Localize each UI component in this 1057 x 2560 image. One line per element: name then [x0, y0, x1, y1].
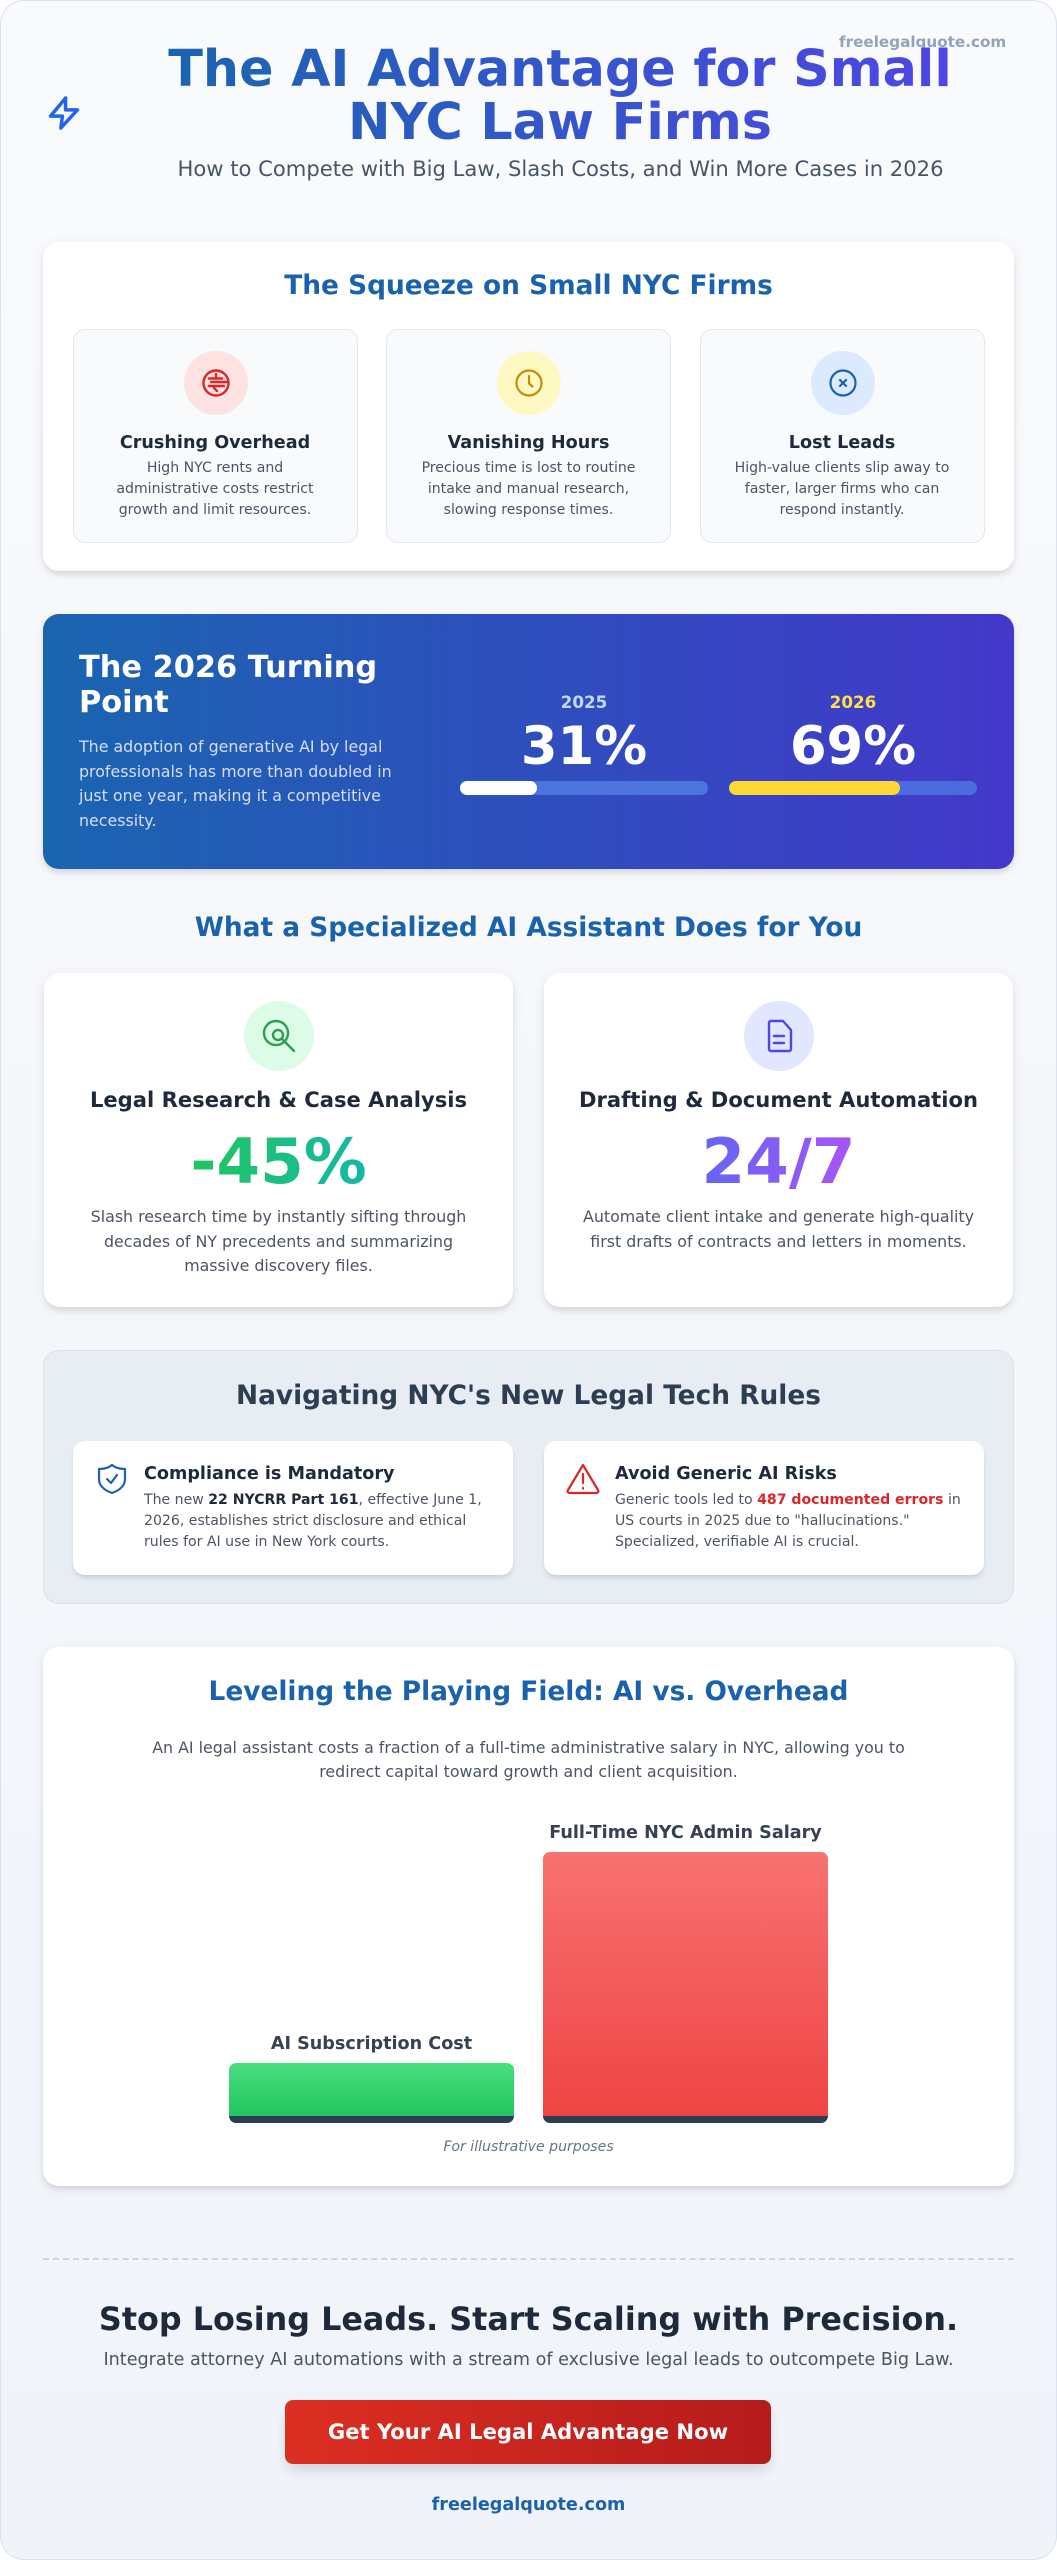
card text [91, 1207, 466, 1275]
card text: 2026, establishes strict disclosure and ethical [144, 1512, 466, 1528]
card: generic AI risks [544, 1441, 984, 1575]
card title: Compliance is Mandatory [144, 1464, 395, 1484]
bar label: AI Subscription Cost [271, 2034, 472, 2054]
progress fill [729, 781, 900, 795]
card title: Lost Leads [789, 433, 895, 453]
year label: 2026 [830, 692, 876, 712]
card text: intake and manual research, [428, 480, 629, 496]
card: crushing overhead [72, 329, 358, 543]
stat: 2026 [729, 692, 977, 795]
CTA button: Get Your AI Legal Advantage Now [328, 2419, 728, 2444]
icon: x circle [810, 351, 874, 415]
bar: admin salary [543, 1823, 828, 2123]
divider [43, 2258, 1014, 2260]
card text: massive discovery files. [184, 1256, 373, 1275]
stat: 2025 [460, 692, 708, 795]
card text [144, 1492, 482, 1550]
card text: Generic tools led to 487 documented errors in [615, 1492, 961, 1508]
bar: AI subscription [229, 2034, 514, 2123]
heading: what AI does: What a Specialized AI Assistant Does for You [195, 912, 862, 943]
percent value: 69% [790, 716, 916, 777]
panel: 2026 turning point [43, 614, 1014, 869]
stat: -45%: -45% [190, 1125, 367, 1198]
card text: Specialized, verifiable AI is crucial. [615, 1534, 859, 1550]
brand watermark: freelegalquote.com [839, 33, 1006, 51]
heading: rules: Navigating NYC's New Legal Tech Rules [236, 1380, 821, 1411]
intro text [152, 1738, 905, 1781]
card: lost leads [700, 329, 984, 543]
CTA text: Integrate attorney AI automations with a stream of exclusive legal leads to outcompete Big Law. [103, 2350, 954, 2370]
card text: Slash research time by instantly sifting through [91, 1207, 466, 1226]
stat: 24/7: 24/7 [701, 1125, 856, 1198]
card: legal research [44, 973, 513, 1307]
title: NYC Law Firms [348, 92, 772, 151]
bar label: Full-Time NYC Admin Salary [549, 1823, 822, 1843]
percent value: 31% [521, 716, 647, 777]
CTA button [285, 2400, 771, 2464]
intro text: An AI legal assistant costs a fraction of a full-time administrative salary in NYC, allowing you to [152, 1738, 905, 1757]
progress fill [460, 781, 537, 795]
banner heading [79, 650, 377, 720]
banner text [78, 737, 392, 830]
card text: Automate client intake and generate high-quality [583, 1207, 974, 1226]
year label: 2025 [561, 692, 607, 712]
progress bar [729, 781, 977, 795]
card: drafting [544, 973, 1013, 1307]
bar chart [229, 1823, 828, 2123]
card text [735, 460, 949, 518]
card text: High-value clients slip away to [735, 460, 949, 476]
heading: the squeeze: The Squeeze on Small NYC Firms [284, 270, 773, 301]
card text: slowing response times. [444, 502, 613, 518]
panel: AI vs overhead [43, 1647, 1014, 2186]
card text: first drafts of contracts and letters in moments. [590, 1232, 967, 1251]
banner text: just one year, making it a competitive [79, 786, 381, 805]
bar shape [229, 2063, 514, 2123]
card text: Precious time is lost to routine [422, 460, 635, 476]
icon: magnifier [244, 1001, 314, 1071]
card text: The new 22 NYCRR Part 161, effective June 1, [144, 1492, 482, 1508]
CTA heading: Stop Losing Leads. Start Scaling with Precision. [99, 2301, 958, 2338]
subtitle: How to Compete with Big Law, Slash Costs, and Win More Cases in 2026 [177, 156, 944, 181]
card title: Avoid Generic AI Risks [615, 1464, 837, 1484]
progress bar [460, 781, 708, 795]
bar shape [543, 1852, 828, 2123]
card text [583, 1207, 974, 1251]
title [160, 42, 960, 148]
icon: lightning bolt [48, 96, 80, 130]
heading: AI vs overhead: Leveling the Playing Field: AI vs. Overhead [209, 1676, 848, 1707]
title: The AI Advantage for Small [168, 39, 952, 98]
card text: decades of NY precedents and summarizing [104, 1232, 453, 1251]
card: vanishing hours [386, 329, 671, 543]
card text: faster, larger firms who can [745, 480, 939, 496]
icon: document [744, 1001, 814, 1071]
card text [615, 1492, 961, 1550]
footnote: For illustrative purposes [443, 2139, 614, 2155]
intro text: redirect capital toward growth and client acquisition. [319, 1762, 738, 1781]
card text: administrative costs restrict [116, 480, 314, 496]
banner text: necessity. [79, 811, 156, 830]
card text: respond instantly. [780, 502, 904, 518]
icon: warning triangle [566, 1464, 600, 1494]
banner text: professionals has more than doubled in [79, 762, 392, 781]
banner heading: Point [79, 685, 169, 720]
icon: shield [98, 1464, 126, 1494]
banner text: The adoption of generative AI by legal [79, 737, 382, 756]
card text: rules for AI use in New York courts. [144, 1534, 389, 1550]
card title: Vanishing Hours [448, 433, 609, 453]
footer link: freelegalquote.com [432, 2495, 625, 2515]
card: compliance [73, 1441, 513, 1575]
panel: the squeeze [43, 242, 1014, 571]
banner heading: The 2026 Turning [79, 650, 377, 685]
card text: US courts in 2025 due to "hallucinations." [615, 1512, 910, 1528]
card text: growth and limit resources. [119, 502, 311, 518]
card title: Drafting & Document Automation [579, 1087, 978, 1112]
card text [116, 460, 314, 518]
card title: Legal Research & Case Analysis [90, 1087, 467, 1112]
card text [422, 460, 635, 518]
icon: clock [497, 351, 561, 415]
card title: Crushing Overhead [120, 433, 310, 453]
panel: legal tech rules [43, 1350, 1014, 1604]
icon: overhead dollar [184, 351, 248, 415]
card text: High NYC rents and [147, 460, 283, 476]
